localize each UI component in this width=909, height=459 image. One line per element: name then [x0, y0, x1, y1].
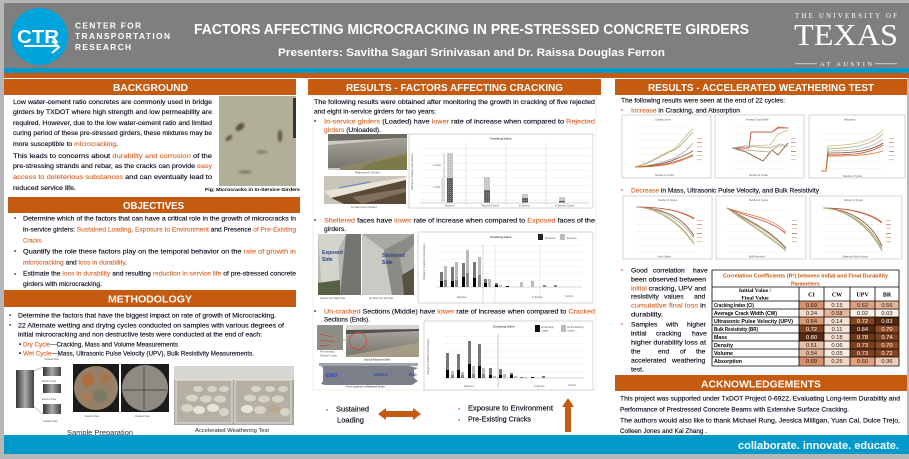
table values: 0.06	[831, 343, 843, 349]
finding: correlation text: the	[696, 348, 706, 356]
chart: absorption curves: Absorption	[844, 118, 856, 122]
finding: correlation text: the	[631, 348, 641, 356]
logo: Center for Transportation Research: CENTER FOR	[75, 20, 141, 30]
chart: cracked vs uncracked: Rejected	[464, 385, 474, 388]
table values: 0.18	[831, 335, 843, 341]
chart: cracking index loaded vs unloaded: 1 Year	[433, 186, 440, 189]
methodology list: initial microcracking and non destructive tests were conducted at the end of each:	[18, 332, 262, 338]
heading: methodology: METHODOLOGY	[108, 294, 192, 306]
arrow: upward	[562, 398, 574, 432]
methodology list: Determine the factors that have the biggest impact on rate of growth of Microcracking.	[18, 312, 276, 320]
captions: core faces: Cracked Face	[135, 415, 151, 418]
chart: cracking index loaded vs unloaded: Rejected Control	[481, 204, 499, 208]
acknowledgements text: The authors would also like to thank Michael Rung, Jessica Milligan, Yuan Cai, Dulce Trejo,	[620, 418, 900, 424]
title: FACTORS AFFECTING MICROCRACKING IN PRE-STRESSED CONCRETE GIRDERS	[194, 22, 749, 38]
diagram: sample preparation: Cracked Face	[44, 358, 60, 361]
chart: cracking index loaded vs unloaded: 2 Years	[433, 164, 442, 167]
finding: correlation text: and	[694, 294, 706, 300]
chart: loss in mass curves: Number of Cycles	[658, 199, 678, 202]
table title	[723, 274, 888, 288]
heading: objectives	[8, 197, 300, 213]
objectives list: Cracks.	[23, 238, 43, 244]
finding: correlation text: higher durability loss at	[631, 340, 706, 346]
presenters: Presenters: Savitha Sagari Srinivasan and Dr. Raissa Douglas Ferron	[278, 47, 665, 59]
finding: correlation text: weathering	[671, 358, 705, 364]
table values: 0.72	[881, 351, 893, 357]
photo: pre-stressing release cracks	[317, 325, 353, 350]
table row labels: Absorption	[714, 359, 743, 365]
finding: correlation text: end	[658, 348, 670, 356]
chart: loss in mass curves: Loss in Mass	[657, 256, 672, 258]
captions: crack photos: Release Cracks	[320, 354, 338, 358]
table values: 0.73	[857, 343, 868, 349]
table values: 0.05	[831, 351, 843, 357]
table row labels	[714, 303, 793, 365]
table values: 0.11	[832, 327, 842, 333]
diagram: sample preparation: Cracked Face	[43, 420, 59, 423]
chart: average crack width curves: Number of Cycles	[749, 174, 769, 177]
table values: 0.84	[857, 327, 869, 333]
methodology list: • Dry Cycle—Cracking, Mass and Volume Measurements	[19, 342, 179, 348]
diagram: test locations on girder	[319, 363, 418, 385]
table title: Parameters	[791, 282, 820, 288]
finding: correlation text: with	[665, 322, 678, 328]
chart: cracking index curves	[622, 115, 711, 178]
acknowledgements text: This project was supported under TxDOT Project 0-6922, Evaluating Long-term Durability and	[620, 396, 900, 402]
caption: microcracks: Fig: Microcracks in In-Service Girders	[205, 187, 300, 193]
logo: University of Texas at Austin	[794, 13, 898, 68]
legend: sustained loading: Loading	[337, 418, 364, 424]
background text: girders by TXDOT where high strength and low permeability are	[13, 109, 212, 116]
background text: access to deleterious substances and can eventually lead to	[13, 174, 212, 181]
table values: 0.36	[881, 359, 893, 365]
photo: accelerated weathering	[174, 366, 294, 425]
legend: exposure and cracks	[458, 406, 553, 424]
photo: rejected girder	[328, 134, 407, 170]
objectives list	[14, 216, 296, 288]
intro text: The following results were obtained after monitoring the growth in cracking of five rejected	[314, 99, 595, 106]
finding: correlation text: have	[693, 268, 708, 274]
photo: sheltered side	[362, 234, 414, 295]
heading: acknowledgements: ACKNOWLEDGEMENTS	[701, 378, 821, 390]
panel: acknowledgements	[615, 375, 907, 435]
legend: exposure and cracks: Pre-Existing Cracks	[468, 416, 532, 424]
chart: cracked vs uncracked	[424, 321, 593, 390]
finding: correlation text: correlation	[653, 268, 685, 274]
captions: core faces: Exterior Face	[85, 415, 100, 418]
acknowledgements text	[620, 396, 900, 435]
captions: crack photos	[320, 350, 391, 362]
panel: objectives	[8, 197, 300, 288]
caption: accelerated weathering: Accelerated Weathering Test	[195, 428, 269, 434]
table values: 0.72	[857, 319, 868, 325]
chart: average crack width curves: Average Crack Width	[746, 118, 769, 122]
photo: sheltered side: Side	[382, 260, 393, 266]
captions: side views: (a)View from Right Side	[320, 297, 346, 300]
photo: microcracks in girder	[219, 96, 296, 186]
intro text	[314, 99, 595, 116]
finding: increase: Increase in Cracking, and Absorption	[631, 108, 740, 114]
table values	[806, 303, 893, 365]
heading: acknowledgements	[615, 375, 907, 391]
chart: sheltered vs exposed: Exposed	[567, 237, 577, 240]
panel: background	[4, 79, 300, 193]
chart: cracking index loaded vs unloaded: In-Service Control	[555, 204, 575, 208]
logo: Center for Transportation Research: TRANSPORTATION	[75, 31, 170, 41]
captions: crack photos: Typical Rejected Girder	[364, 358, 391, 362]
table values: 0.62	[857, 303, 868, 309]
chart: bulk resistivity curves	[716, 196, 806, 259]
finding: correlation text: cumulative final loss in	[631, 302, 706, 310]
objectives list: Estimate the loss in durability and resulting reduction in service life of pre-stressed concrete	[23, 270, 296, 278]
acknowledgements text: Colleen Jones and Kai Zhang .	[620, 428, 707, 435]
table title: Correlation Coefficients (R²) between Initial and Final Durability	[723, 274, 888, 280]
legend: sustained loading: Sustained	[336, 406, 369, 414]
logo: Center for Transportation Research: CTR	[17, 26, 59, 47]
logo: University of Texas at Austin: AT AUSTIN	[820, 61, 872, 68]
table: correlation coefficients	[712, 270, 899, 366]
finding: decrease: Decrease in Mass, Ultrasonic Pulse Velocity, and Bulk Resistivity	[631, 188, 820, 194]
table values: 0.72	[806, 327, 817, 333]
heading: factors affecting cracking	[308, 79, 601, 95]
acknowledgements text: Performance of Prestressed Concrete Beams with Extensive Surface Cracking.	[620, 406, 849, 414]
table values: 0.74	[881, 335, 893, 341]
diagram: test locations on girder: MIDDLE	[374, 373, 388, 377]
table column headers: UPV	[856, 292, 869, 298]
diagram: test locations on girder: END	[326, 373, 338, 379]
chart: average crack width curves	[715, 115, 804, 178]
heading: methodology	[4, 290, 296, 307]
heading: accelerated weathering	[615, 79, 907, 95]
finding: correlation text: higher	[687, 322, 707, 328]
table row labels: Average Crack Width (CW)	[714, 311, 777, 317]
photo: in-service girder	[324, 176, 406, 204]
chart: cracked vs uncracked: Cracking Index	[493, 324, 515, 328]
arrow: horizontal double	[378, 408, 421, 420]
panel: results - accelerated weathering	[615, 79, 907, 374]
logo: Center for Transportation Research	[11, 8, 170, 65]
chart: bulk resistivity curves: Number of Cycles	[749, 199, 769, 202]
table values: 0.69	[806, 303, 817, 309]
background text: pre-stressing strands and rebar, as the cracks can provide easy	[13, 163, 213, 170]
table values: 0.64	[806, 319, 818, 325]
table values: 0.69	[806, 359, 817, 365]
objectives list: Quantify the role these factors play on the temporal behavior on the rate of growth in	[23, 248, 296, 256]
objectives list: Determine which of the factors that can have a critical role in the growth of microcracks in	[23, 216, 296, 222]
finding: correlation text: accelerated	[631, 358, 666, 364]
table values: 0.78	[857, 335, 868, 341]
table values: 0.70	[881, 327, 893, 333]
chart: cracking index loaded vs unloaded: In-Service	[519, 204, 530, 208]
background text	[13, 99, 213, 192]
table values: 0.03	[881, 311, 893, 317]
panel: results - factors affecting cracking	[308, 79, 601, 432]
methodology list: 22 Alternate wetting and drying cycles conducted on samples with various degrees of	[18, 322, 284, 330]
chart: cracking index loaded vs unloaded: Change in Cracking Index (mm/m)	[411, 153, 414, 190]
finding: correlation text: initial	[631, 330, 647, 338]
finding: correlation text: test.	[631, 366, 644, 374]
photo: exposed side	[318, 234, 361, 295]
header banner	[4, 3, 909, 78]
table values: 0.14	[831, 319, 843, 325]
background text: This leads to concerns about durability and corrosion of the	[13, 153, 212, 160]
table values: 0.73	[857, 351, 868, 357]
captions: side views: (b) View from Left Side	[369, 297, 394, 300]
table column headers: CW	[832, 292, 842, 298]
caption: rejected girder: Rejected Girder	[355, 172, 380, 174]
legend: sustained loading	[326, 406, 369, 424]
table row labels: Density	[714, 343, 734, 349]
chart: absorption curves: Number of Cycles	[843, 175, 863, 178]
table row labels: Volume	[714, 351, 733, 357]
captions: core faces	[85, 415, 151, 418]
methodology list: • Wet Cycle—Mass, Ultrasonic Pulse Velocity (UPV), Bulk Resistivity Measurements.	[19, 350, 254, 358]
table values: 0.24	[806, 311, 818, 317]
heading: background: BACKGROUND	[113, 82, 188, 94]
finding: loaded vs unloaded: girders (Unloaded).	[324, 127, 381, 134]
chart: cracked vs uncracked: Cracks	[567, 330, 575, 332]
diagram: sample preparation: Exterior Face	[42, 380, 57, 383]
table values: 0.02	[857, 311, 868, 317]
chart: cracked vs uncracked: Pre-Existing	[541, 326, 555, 329]
finding: correlation text: cracking	[656, 330, 682, 338]
table values: 0.70	[881, 343, 893, 349]
chart: cracking index loaded vs unloaded: Cracking Index	[490, 136, 512, 140]
chart: cracked vs uncracked: Change in Cracking Index (mm/m)	[427, 338, 430, 375]
table values: 0.60	[857, 359, 868, 365]
captions: crack photos: Pre-stressing	[320, 350, 335, 354]
finding: correlation text: initial cracking, UPV and	[631, 286, 706, 292]
photo: sheltered side: Sheltered	[382, 253, 405, 259]
table values: 0.56	[881, 303, 893, 309]
finding: loaded vs unloaded: In-service girders (Loaded) have lower rate of increase when compared to Rejected	[324, 118, 595, 126]
background text: more susceptible to microcracking.	[13, 141, 118, 148]
panel: methodology	[4, 290, 296, 437]
table column headers: Final Value	[741, 296, 769, 302]
photo: exterior face core	[73, 364, 119, 412]
chart: sheltered vs exposed: Rejected	[457, 296, 467, 299]
table values: 0.51	[806, 343, 817, 349]
table column headers	[739, 288, 892, 302]
finding: sheltered vs exposed	[314, 218, 595, 233]
finding: correlation text: Samples	[631, 322, 658, 328]
chart: cracking index loaded vs unloaded: Rejected	[445, 204, 455, 208]
objectives list: microcracking and loss in durability.	[23, 260, 127, 266]
background text: curing period of these pre-stressed girders, these mixtures may be	[13, 130, 212, 137]
logo: University of Texas at Austin: TEXAS	[794, 17, 898, 52]
chart: sheltered vs exposed: Change in Cracking Index (mm/m)	[423, 243, 426, 280]
diagram: sample preparation: Exterior Face	[42, 398, 57, 401]
background text: Low water-cement ratio concretes are commonly used in bridge	[13, 99, 212, 106]
table cells	[799, 301, 899, 366]
logo: University of Texas at Austin: THE UNIVERSITY OF	[795, 13, 897, 20]
finding: correlation text: values	[664, 294, 684, 300]
chart: cracked vs uncracked: No Pre-Existing	[567, 326, 584, 329]
methodology list	[9, 312, 284, 358]
chart: cracking index loaded vs unloaded	[409, 134, 593, 208]
finding: uncracked vs cracked: Sections (Ends).	[324, 316, 370, 324]
table values: 0.58	[831, 311, 843, 317]
finding: uncracked vs cracked: Un-cracked Sections (Middle) have lower rate of increase when compared to Cracked	[324, 308, 595, 316]
objectives list: in-service girders: Sustained Loading, Exposure to Environment and Presence of Pre-Existing	[23, 226, 296, 234]
caption: in-service girder: In-Service Girder	[351, 206, 377, 209]
photo: exposed side: Exposed	[322, 250, 343, 256]
tagline: collaborate. innovate. educate.	[738, 440, 899, 452]
chart: cracking index curves: Cracking Index	[655, 118, 672, 122]
finding: uncracked vs cracked	[314, 308, 595, 324]
table values: 0.83	[881, 319, 893, 325]
chart: ultrasonic pulse velocity curves: Number of Cycles	[844, 199, 864, 202]
table values: 0.80	[806, 335, 817, 341]
finding: correlation text: been observed between	[631, 276, 706, 284]
heading: background	[4, 79, 296, 95]
chart: cracked vs uncracked: Cracks	[541, 330, 549, 332]
finding: sheltered vs exposed: Sheltered faces have lower rate of increase when compared to Exposed faces of the	[324, 218, 595, 224]
table column headers: BR	[883, 292, 892, 298]
table row labels: Cracking Index (CI)	[714, 303, 754, 309]
chart: cracked vs uncracked: Control	[568, 384, 576, 387]
chart: sheltered vs exposed: Sheltered	[545, 237, 556, 240]
table column headers: Initial Value /	[739, 288, 772, 294]
background text: reduced service life.	[13, 185, 76, 192]
chart: ultrasonic pulse velocity curves	[810, 196, 902, 259]
photo: typical rejected girder	[346, 325, 419, 357]
chart: sheltered vs exposed: Cracking Index	[490, 235, 512, 239]
chart: ultrasonic pulse velocity curves: Ultrasonic Pulse Velocity	[842, 256, 869, 258]
chart: loss in mass curves	[623, 196, 712, 259]
finding: correlation text: of	[680, 348, 686, 356]
chart: cracking index curves: Number of Cycles	[655, 174, 675, 177]
photo: cracked face core	[121, 364, 169, 412]
finding: correlation text: durability.	[631, 312, 663, 318]
diagram: test locations on girder: END	[409, 373, 417, 377]
finding: sheltered vs exposed: girders.	[324, 226, 346, 233]
chart: cracked vs uncracked: In-Service	[534, 385, 545, 388]
finding: loaded vs unloaded	[314, 118, 595, 134]
chart: absorption curves	[809, 115, 905, 178]
finding: correlation text: Good	[631, 268, 648, 274]
captions: side views	[320, 297, 394, 300]
finding: correlation text: resistivity	[631, 294, 660, 300]
finding: correlation text	[621, 268, 708, 374]
table values: 0.25	[831, 359, 843, 365]
table values: 0.15	[831, 303, 843, 309]
chart: bulk resistivity curves: Bulk Resistivity	[749, 256, 766, 258]
background text: required. However, due to the low water-cement ratio and limited	[13, 120, 212, 127]
table row labels: Mass	[714, 335, 727, 341]
footer banner	[4, 435, 909, 454]
diagram: sample preparation	[16, 358, 61, 423]
heading: objectives: OBJECTIVES	[123, 200, 184, 212]
photo: exposed side: Side	[322, 257, 333, 263]
objectives list: girders with microcracking.	[23, 281, 102, 288]
legend: exposure and cracks: Exposure to Environment	[468, 406, 553, 412]
table row labels: Bulk Resistivity (BR)	[714, 327, 758, 333]
chart: sheltered vs exposed	[418, 232, 593, 303]
heading: factors affecting cracking: RESULTS - FACTORS AFFECTING CRACKING	[346, 82, 563, 94]
table row labels: Ultrasonic Pulse Velocity (UPV)	[714, 319, 793, 325]
caption: test locations: Test Locations on Rejected Girder	[346, 386, 385, 388]
table values: 0.54	[806, 351, 818, 357]
logo: Center for Transportation Research: RESEARCH	[75, 42, 131, 52]
heading: accelerated weathering: RESULTS - ACCELERATED WEATHERING TEST	[648, 82, 875, 94]
intro text: and eight in-service girders for two years:	[314, 108, 436, 116]
caption: sample preparation: Sample Preparation	[67, 430, 133, 437]
chart: sheltered vs exposed: In-Service	[532, 296, 543, 299]
chart: sheltered vs exposed: Control	[565, 295, 573, 298]
finding: correlation text: have	[692, 330, 707, 338]
weathering intro: The following results were seen at the end of 22 cycles:	[621, 98, 785, 104]
table column headers: CI	[808, 292, 815, 298]
